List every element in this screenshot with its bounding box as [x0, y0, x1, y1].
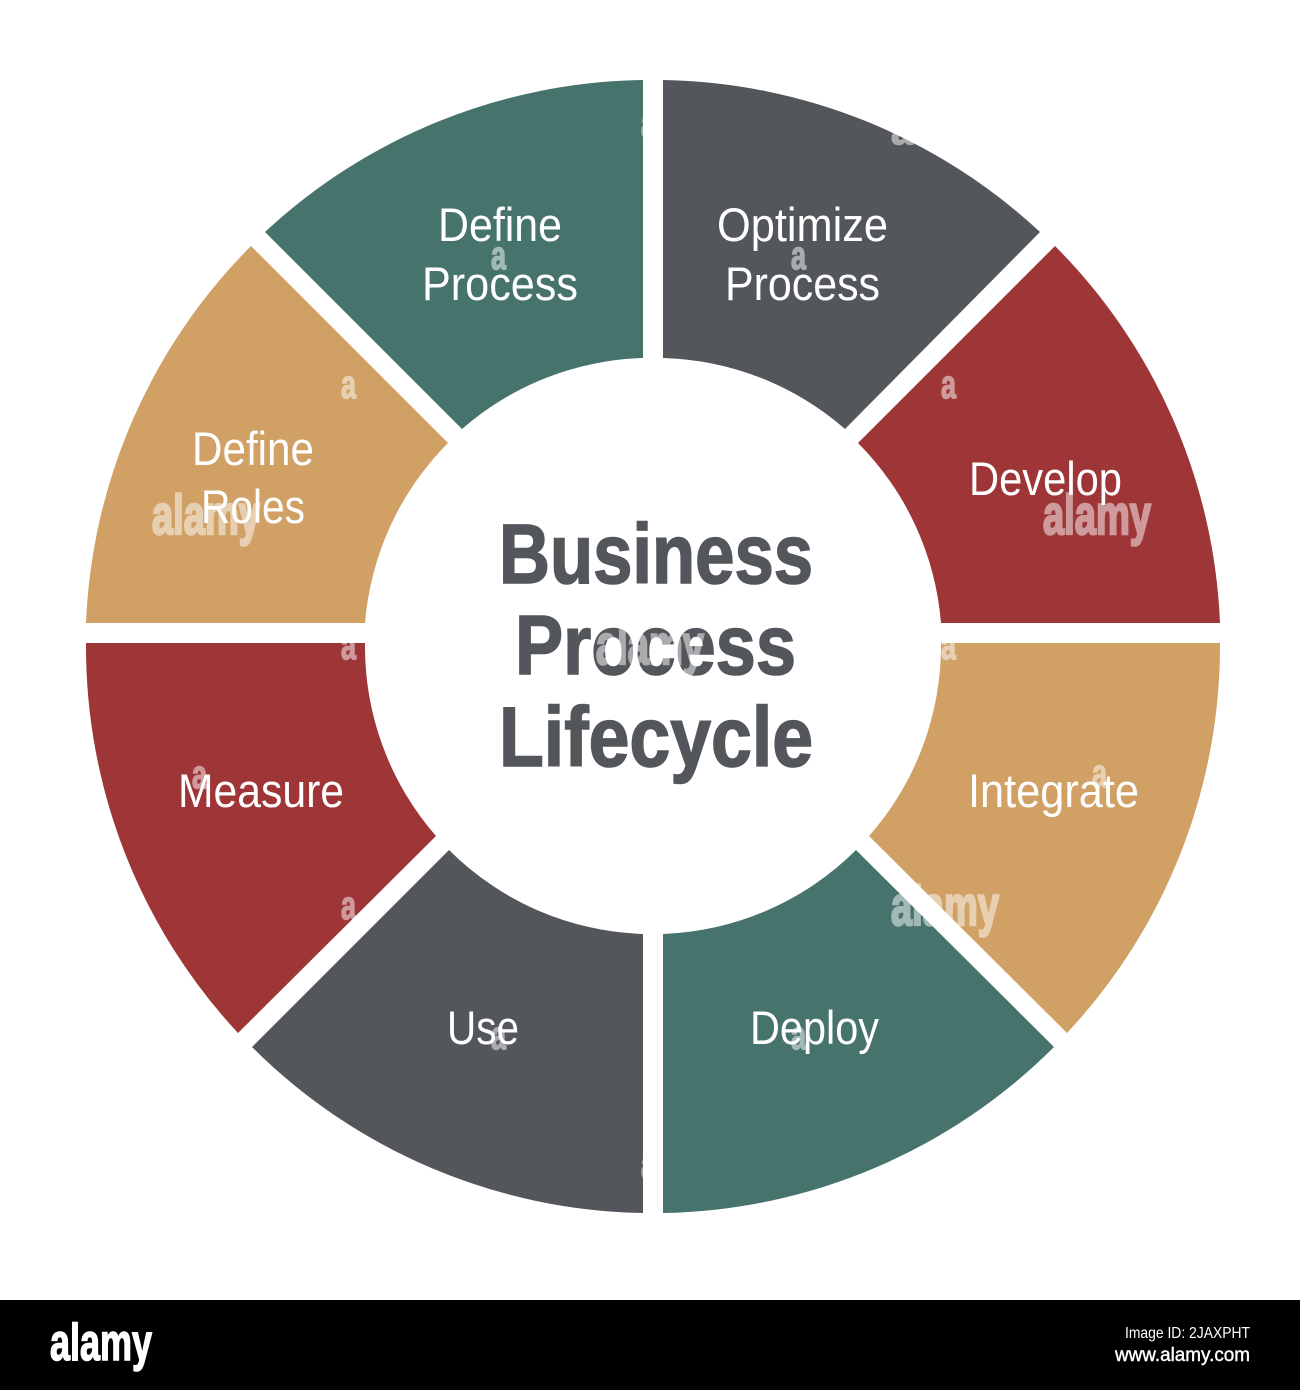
- watermarks: a: [341, 363, 357, 407]
- label: Integrate: Integrate: [968, 764, 1139, 817]
- segment: Integrate: [869, 643, 1220, 1033]
- watermarks: a: [192, 753, 208, 797]
- watermarks: alamy: [1043, 483, 1151, 546]
- label: Deploy: Deploy: [750, 1001, 879, 1054]
- watermarks: a: [341, 624, 357, 668]
- watermarks: a: [491, 1014, 507, 1058]
- label: Use: Use: [447, 1001, 519, 1054]
- watermarks: alamy: [152, 483, 260, 546]
- label: Measure: Measure: [178, 764, 344, 817]
- watermarks: a: [641, 1143, 657, 1187]
- label: Define Roles: Roles: [201, 480, 305, 533]
- segment: Use: [252, 850, 643, 1213]
- watermarks: a: [791, 234, 807, 278]
- watermarks: a: [791, 1014, 807, 1058]
- watermarks: a: [891, 109, 914, 153]
- watermarks: [152, 102, 1151, 1187]
- segment: Develop: [858, 246, 1220, 623]
- image id: Image ID: 2JAXPHT: [1125, 1325, 1250, 1342]
- segment: Measure: [86, 643, 436, 1033]
- label: Develop: Develop: [969, 452, 1122, 505]
- website: www.alamy.com: [1114, 1345, 1250, 1366]
- footer bar: [0, 1300, 1300, 1390]
- label: Define Process: Process: [422, 257, 578, 310]
- segment: Define Process: [265, 80, 643, 429]
- title: Business Process Lifecycle: Lifecycle: [499, 690, 813, 784]
- label: Define Process: [422, 198, 578, 310]
- label: Optimize Process: [717, 198, 888, 310]
- title: Business Process Lifecycle: [499, 507, 813, 784]
- watermarks: a: [491, 234, 507, 278]
- watermarks: alamy: [891, 874, 999, 937]
- watermarks: a: [941, 363, 957, 407]
- footer logo: alamy: [50, 1314, 152, 1372]
- watermarks: alamy: [596, 613, 704, 676]
- label: Define Roles: Define: [192, 422, 314, 475]
- watermarks: a: [941, 624, 957, 668]
- watermarks: a: [641, 102, 657, 146]
- segment: Optimize Process: [663, 80, 1040, 429]
- label: Optimize Process: Process: [725, 257, 880, 310]
- title: Business Process Lifecycle: Process: [515, 598, 796, 692]
- segment: Define Roles: [86, 246, 448, 623]
- watermarks: a: [341, 884, 357, 928]
- label: Optimize Process: Optimize: [717, 198, 888, 251]
- label: Define Process: Define: [438, 198, 562, 251]
- segment: Deploy: [663, 850, 1054, 1213]
- watermarks: a: [1092, 752, 1108, 796]
- label: Define Roles: [192, 422, 314, 533]
- title: Business Process Lifecycle: Business: [499, 507, 813, 601]
